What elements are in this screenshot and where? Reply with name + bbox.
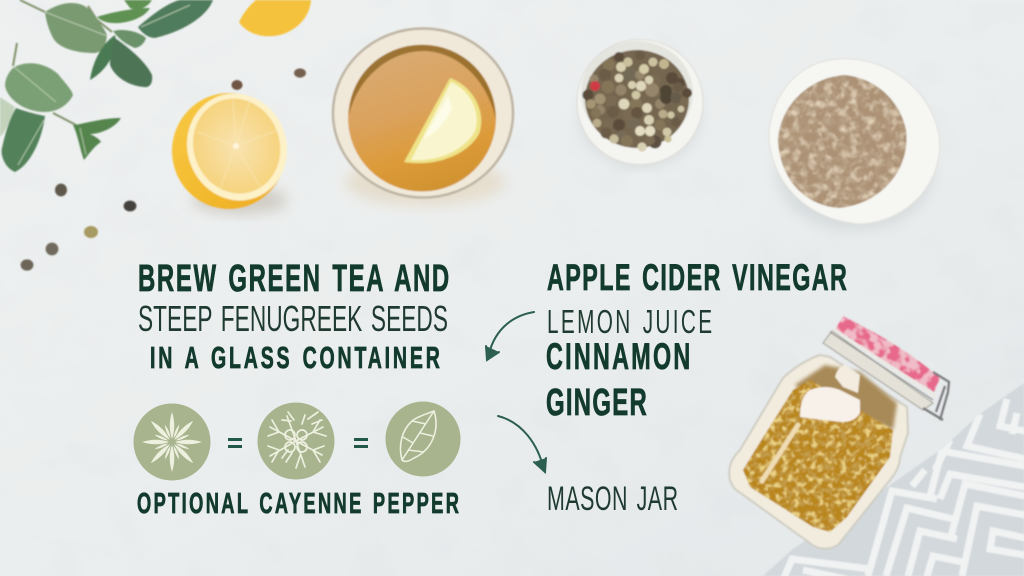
illustration: mason jar xyxy=(729,316,949,549)
leaf: pale at edge xyxy=(0,97,15,137)
leaf: narrow xyxy=(90,35,116,80)
peppercorns xyxy=(582,50,692,152)
clasp wire xyxy=(923,372,949,420)
lemon wedge in tea xyxy=(404,78,481,163)
label: optional cayenne pepper: OPTIONAL CAYENNE PEPPER xyxy=(137,488,459,520)
lid neck ring xyxy=(823,331,933,410)
illustration: striped towel xyxy=(763,383,1024,576)
illustration: lemon half xyxy=(172,79,302,215)
heading: brew green tea: BREW GREEN TEA AND xyxy=(138,256,449,299)
heading: steep fenugreek seeds: STEEP FENUGREEK SEEDS xyxy=(138,300,448,339)
arrow: to mason jar xyxy=(498,416,546,472)
jar glass body xyxy=(729,355,908,549)
illustration: scattered seeds xyxy=(21,68,306,271)
icon: leaf outline xyxy=(386,402,460,476)
text: lemon juice: LEMON JUICE xyxy=(547,303,712,340)
leaf: mint sprig xyxy=(73,118,121,160)
leaf: left dark xyxy=(2,108,45,172)
white sugar mounds xyxy=(835,365,860,393)
powder xyxy=(778,75,907,208)
dark crescent at top of tea xyxy=(349,45,496,120)
illustration: ground spice bowl xyxy=(769,59,940,230)
lid silver rim xyxy=(833,329,936,396)
leaf: small bright sprigs xyxy=(97,0,152,23)
icon: snowflake herb xyxy=(258,402,334,480)
leaf: top dark xyxy=(138,0,213,38)
leaf: middle pale xyxy=(113,30,146,48)
illustration: lemon wedge top xyxy=(239,0,311,36)
leaf: top left large xyxy=(45,3,107,53)
illustration: glass bowl with tea and lemon wedge xyxy=(333,28,513,206)
leaf: lower dark xyxy=(110,38,152,87)
illustration: mint leaves xyxy=(0,0,213,172)
pale streak xyxy=(762,425,798,481)
icon: equals xyxy=(228,438,242,448)
arrow: to container xyxy=(486,312,534,360)
text: cinnamon: CINNAMON xyxy=(546,335,690,377)
heading: apple cider vinegar: APPLE CIDER VINEGAR xyxy=(547,256,847,298)
leaf veins xyxy=(14,5,190,165)
lid red pattern xyxy=(835,316,940,392)
leaf: left large xyxy=(5,63,73,112)
text: mason jar: MASON JAR xyxy=(547,480,678,518)
heading: in a glass container: IN A GLASS CONTAINER xyxy=(150,342,440,375)
jar contents xyxy=(743,380,893,532)
illustration: peppercorn bowl xyxy=(577,40,703,167)
icon: white flower xyxy=(134,404,210,480)
icon: equals xyxy=(354,438,368,448)
tan shadow near the neck xyxy=(795,365,897,430)
text: ginger: GINGER xyxy=(546,380,647,423)
